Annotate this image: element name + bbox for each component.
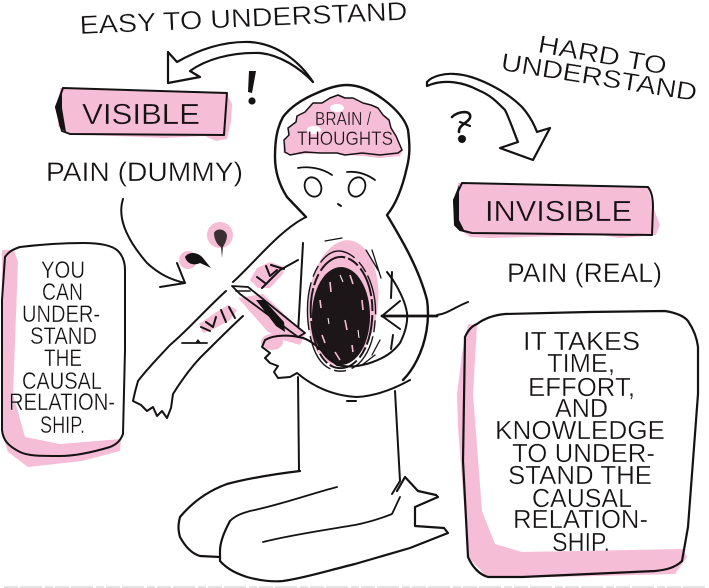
knife	[232, 286, 305, 345]
heading: hard to understand: UNDERSTAND	[499, 48, 699, 107]
hand and crossing arm	[261, 272, 410, 397]
left arm with cuts	[133, 217, 306, 418]
brain	[283, 95, 403, 158]
panel: it takes time: IT TAKES	[523, 326, 640, 356]
dark pain in chest	[302, 237, 384, 371]
label: pain real: PAIN (REAL)	[507, 258, 662, 288]
head and right side of body	[275, 85, 428, 380]
arrow: brain to visible	[168, 42, 313, 83]
torso and legs	[178, 377, 448, 581]
panel: it takes time: TO UNDER-	[512, 438, 655, 468]
panel: you can understand: YOU	[41, 257, 85, 284]
panel: it takes time	[457, 311, 698, 578]
brain: THOUGHTS	[297, 129, 393, 150]
label box: invisible	[453, 183, 660, 238]
panel: it takes time: EFFORT,	[528, 372, 635, 402]
panel: it takes time: TIME,	[547, 348, 615, 378]
panel: you can understand: THE	[44, 345, 82, 372]
panel: you can understand: STAND	[30, 323, 97, 350]
panel: it takes time: KNOWLEDGE	[495, 415, 665, 445]
icon: question mark	[452, 112, 470, 143]
label box: visible: VISIBLE	[82, 99, 200, 131]
label: pain dummy: PAIN (DUMMY)	[46, 157, 243, 187]
panel: it takes time: SHIP.	[552, 527, 610, 557]
arrow: brain to invisible	[427, 74, 550, 160]
bottom page edge	[4, 586, 705, 588]
label box: invisible: INVISIBLE	[485, 196, 632, 228]
panel: you can understand: CAUSAL	[22, 368, 102, 395]
panel: you can understand: RELATION-	[9, 389, 115, 416]
panel: it takes time: RELATION-	[513, 504, 648, 534]
arrow: real pain to chest	[382, 301, 468, 329]
brain: BRAIN /	[315, 109, 371, 129]
arrow: dummy pain to arm	[121, 199, 185, 287]
panel: you can understand: CAN	[42, 279, 83, 306]
heading: hard to understand	[499, 30, 699, 107]
panel: it takes time: AND	[555, 393, 608, 423]
label box: visible	[55, 88, 232, 141]
figure: kneeling person	[133, 85, 448, 581]
face	[298, 167, 375, 206]
panel: you can understand	[1, 243, 125, 467]
panel: it takes time: STAND THE	[508, 460, 652, 490]
heading: hard to understand: HARD TO	[536, 30, 669, 80]
panel: it takes time: CAUSAL	[532, 483, 632, 513]
panel: you can understand: UNDER-	[22, 301, 100, 328]
blood drops	[179, 222, 233, 269]
icon: exclamation mark	[248, 71, 256, 105]
panel: you can understand: SHIP.	[40, 412, 85, 439]
